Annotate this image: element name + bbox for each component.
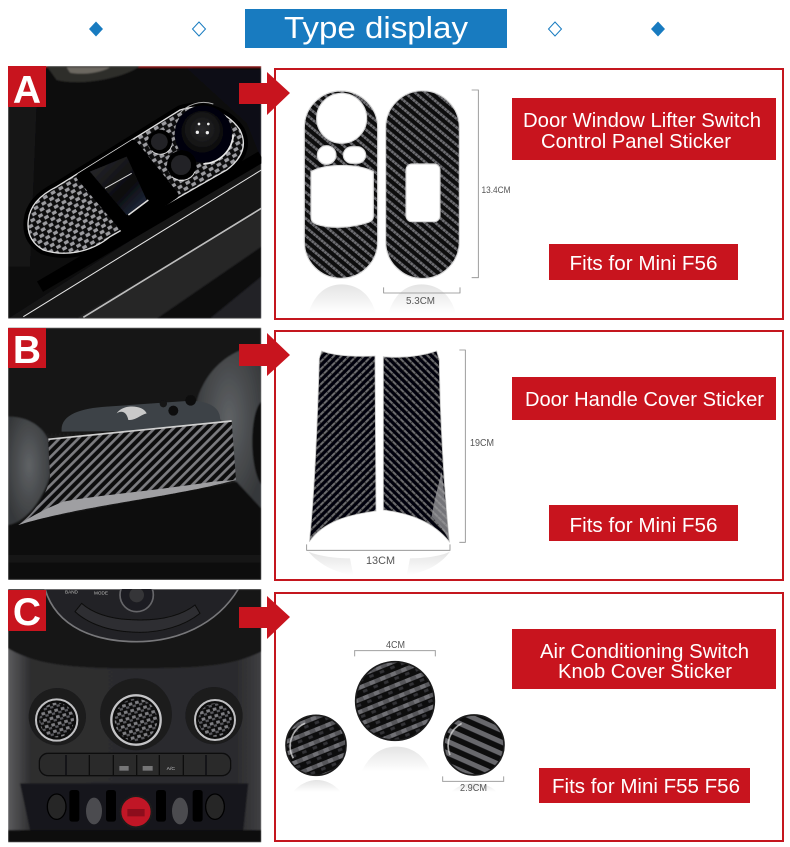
- badge A: A: [13, 69, 41, 112]
- toggle switches: [47, 790, 224, 824]
- carbon cover: [18, 422, 236, 525]
- dimension: 13.4CM: 13.4CM: [482, 185, 511, 196]
- dimension: 5.3CM: 5.3CM: [406, 296, 435, 307]
- preset buttons: [75, 603, 200, 632]
- right round door pull: [197, 345, 261, 508]
- height bracket: [459, 350, 465, 542]
- title banner: [245, 9, 507, 48]
- dimension: 13CM: 13CM: [366, 555, 395, 567]
- 4CM bracket: [355, 651, 435, 656]
- A/C button text: A/C: [167, 766, 175, 772]
- right sticker: [386, 91, 459, 278]
- icon: outline diamond right: [548, 22, 562, 36]
- width bracket: [307, 544, 450, 550]
- row A: window switch panel: [8, 66, 783, 319]
- header: [89, 9, 665, 48]
- reflections: [308, 284, 456, 313]
- badge A: [8, 66, 46, 112]
- height bracket: [472, 90, 478, 278]
- right knob: [444, 715, 504, 775]
- label A title: [512, 98, 776, 160]
- width bracket: [384, 287, 460, 293]
- dimension: 4CM: 4CM: [386, 640, 405, 651]
- climate button row: [39, 753, 231, 776]
- row B: door handle cover: [8, 328, 783, 580]
- icon: solid diamond far right: [651, 22, 665, 36]
- product B: door handle cover stickers: [307, 350, 465, 576]
- label C title: Air Conditioning Switch: [540, 641, 749, 663]
- icon: solid diamond far left: [89, 22, 103, 36]
- window switch unit: [62, 401, 220, 432]
- product A: two switch panel stickers: [304, 90, 478, 313]
- left sticker: [304, 91, 378, 278]
- photo: door window switch with carbon panel: [8, 66, 261, 319]
- label A title: Door Window Lifter Switch: [523, 110, 761, 132]
- 2.9CM bracket: [443, 776, 504, 781]
- dimension: 19CM: 19CM: [470, 438, 494, 449]
- icon: outline diamond left: [192, 22, 206, 36]
- radio text: MODE: [94, 590, 108, 595]
- arrow C: [239, 596, 290, 639]
- label B fitment: Fits for Mini F56: [570, 515, 718, 537]
- panel B frame: [275, 331, 783, 580]
- left knob: [29, 688, 86, 745]
- arrow A: [239, 72, 290, 115]
- label B title: Door Handle Cover Sticker: [525, 389, 764, 411]
- centre knob: [100, 678, 172, 750]
- knob arrows: [196, 123, 210, 134]
- label C fitment: Fits for Mini F55 F56: [552, 776, 740, 798]
- lower dark: [8, 482, 261, 580]
- left armrest: [8, 417, 50, 525]
- switch housing: [80, 143, 175, 230]
- label C title: [512, 629, 776, 689]
- reflection: [308, 552, 450, 576]
- row C: air conditioning knobs: [8, 578, 783, 842]
- title text: Type display: [284, 10, 469, 45]
- carbon panel: [28, 107, 243, 253]
- glossy switch: [90, 157, 147, 215]
- reflections: [293, 747, 497, 792]
- light corner on right sticker: [432, 472, 449, 542]
- label A fitment: [549, 244, 738, 280]
- panel C frame: [275, 593, 783, 841]
- product C: three knob stickers: [286, 651, 504, 792]
- lower console strip: [20, 783, 248, 830]
- photo: centre console with carbon knobs: [8, 578, 261, 842]
- dimension: 2.9CM: 2.9CM: [460, 782, 487, 794]
- right knob: [185, 687, 243, 744]
- label B title: [512, 377, 776, 420]
- badge C: C: [13, 591, 41, 634]
- left door sticker: [309, 351, 376, 542]
- panel A frame: [275, 69, 783, 319]
- large knob: [356, 662, 434, 740]
- upper dark trim: [8, 589, 261, 668]
- start-stop button: [120, 796, 152, 827]
- radio unit ring: [45, 589, 238, 642]
- left knob: [286, 715, 346, 775]
- label A title: Control Panel Sticker: [541, 131, 731, 153]
- badge B: B: [13, 329, 41, 372]
- right door sticker: [383, 351, 449, 542]
- label B fitment: [549, 505, 738, 541]
- photo: door handle with carbon cover: [8, 328, 261, 580]
- radio text: BAND: [65, 589, 79, 594]
- small buttons: [148, 130, 172, 154]
- mirror knob: [175, 105, 232, 163]
- label C fitment: [539, 768, 750, 803]
- label C title: Knob Cover Sticker: [558, 661, 732, 683]
- carbon panel bezel: [28, 107, 243, 253]
- label A fitment: Fits for Mini F56: [570, 253, 718, 275]
- arrow B: [239, 333, 290, 376]
- centre dial: [119, 589, 154, 612]
